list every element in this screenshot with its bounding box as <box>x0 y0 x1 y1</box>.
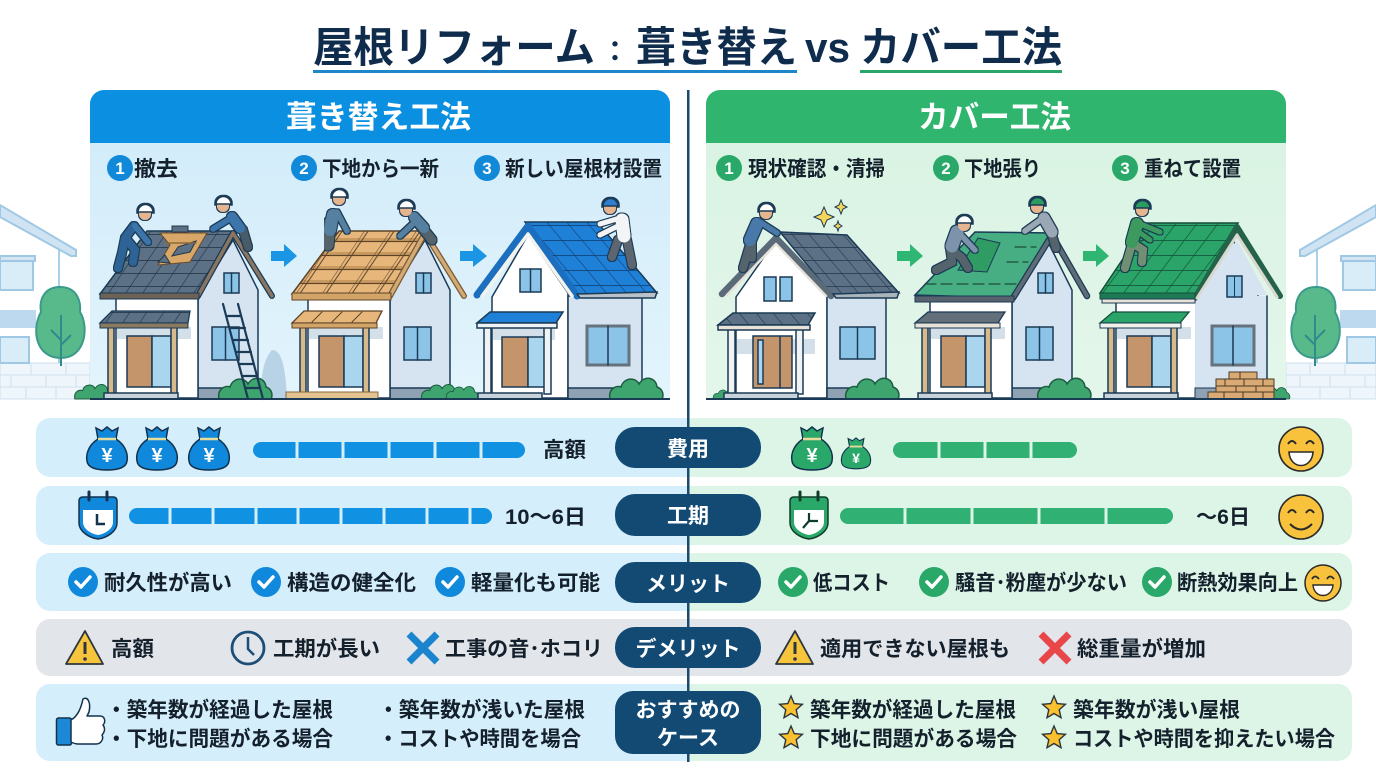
step 1 label <box>107 155 178 181</box>
worker: crouching on roof <box>118 205 153 268</box>
list: replacement cases column 1 <box>106 698 333 751</box>
value: 10 to 6 days: 10〜6日 <box>505 506 586 529</box>
icon: two money bags <box>792 427 871 470</box>
pill label: recommended cases <box>615 691 761 754</box>
list: cover cases column 1: 築年数が経過した屋根 <box>810 698 1016 722</box>
demerit: added weight: 総重量が増加 <box>1077 637 1206 661</box>
arrow 1 <box>271 244 297 267</box>
bar: short duration <box>840 508 1173 524</box>
list: replacement cases column 1: ・下地に問題がある場合 <box>106 727 333 751</box>
comparison row: cost <box>36 418 1352 477</box>
merit: less noise and dust <box>919 567 1127 597</box>
panel: cover method <box>706 90 1290 400</box>
list: cover cases column 2: コストや時間を抑えたい場合 <box>1073 728 1335 751</box>
step 2 label: 2 <box>941 159 951 178</box>
icon: two money bags: ¥ <box>852 450 860 466</box>
merit: durable: 耐久性が高い <box>104 571 232 595</box>
pill label: recommended cases: おすすめの <box>636 699 740 722</box>
demerit: expensive: 高額 <box>111 638 154 661</box>
panel: roof replacement <box>75 90 670 400</box>
title: 葺き替え <box>636 24 797 71</box>
value: up to 6 days: 〜6日 <box>1196 506 1250 529</box>
demerit: unsuitable roofs: 適用できない屋根も <box>820 638 1010 661</box>
icon: three money bags: ¥ <box>151 445 163 467</box>
worker: removing tiles <box>213 196 248 247</box>
comparison row: recommended cases <box>36 684 1352 761</box>
ground line right <box>706 398 1286 400</box>
icon: red cross <box>1041 634 1069 662</box>
list: cover cases column 2: 築年数が浅い屋根 <box>1073 698 1240 722</box>
merit: better insulation: 断熱効果向上 <box>1177 572 1298 595</box>
house: new blue roof <box>446 198 663 399</box>
step 1 label: 現状確認・清掃 <box>748 158 885 181</box>
step 3 label: 3 <box>1120 159 1130 178</box>
demerit: long duration: 工期が長い <box>273 637 380 661</box>
panel header: cover method <box>706 90 1286 143</box>
icon: three money bags: ¥ <box>203 445 215 467</box>
merit: low cost <box>778 567 890 597</box>
worker: on ridge <box>1025 198 1056 248</box>
list: replacement cases column 2: ・コストや時間を場合 <box>378 728 581 751</box>
pill label: cost: 費用 <box>667 438 709 461</box>
list: replacement cases column 2 <box>378 698 585 751</box>
worker: kneeling with sheet <box>936 216 975 270</box>
title: 屋根リフォーム <box>313 24 595 71</box>
step 3 label: 重ねて設置 <box>1144 158 1241 181</box>
step 2 label <box>291 155 439 181</box>
comparison row: merits <box>36 553 1352 611</box>
title: カバー工法 <box>860 24 1062 71</box>
merit: sound structure: 構造の健全化 <box>287 572 416 595</box>
worker: laying blue panels <box>600 198 632 265</box>
pill label: duration <box>615 494 761 536</box>
ground line left <box>90 398 670 400</box>
center divider <box>687 90 690 762</box>
step 2 label <box>933 155 1041 181</box>
arrow 2 <box>460 244 487 267</box>
worker: on gable <box>399 201 432 240</box>
pill label: merits <box>615 562 761 603</box>
step 1 label: 1 <box>115 159 125 178</box>
step 3 label: 新しい屋根材設置 <box>505 158 662 181</box>
panel header: roof replacement: 葺き替え工法 <box>286 100 471 135</box>
value: high cost: 高額 <box>543 439 586 462</box>
sparkles <box>814 200 847 231</box>
step 3 label: 3 <box>482 159 492 178</box>
bar: low cost <box>893 442 1077 458</box>
comparison row: duration <box>36 486 1352 545</box>
arrow 3 <box>897 244 923 267</box>
ladder <box>223 304 263 399</box>
step 2 label: 2 <box>299 159 309 178</box>
icon: blue calendar clock <box>79 492 117 539</box>
house: tearing off old roof <box>75 196 287 399</box>
icon: warning triangle <box>776 631 813 664</box>
step 1 label: 撤去 <box>134 158 178 181</box>
background houses left and right <box>0 205 1376 399</box>
pill label: cost <box>615 427 761 468</box>
title: ： <box>601 36 629 67</box>
title <box>313 24 1062 73</box>
icon: green calendar clock <box>790 492 828 539</box>
merit: less noise and dust: 騒音･粉塵が少ない <box>955 571 1127 595</box>
bar: high cost <box>253 442 525 458</box>
title: vs <box>805 24 850 71</box>
icon: grinning face <box>1279 427 1323 471</box>
icon: thumbs up <box>56 698 105 745</box>
merit: lighter weight: 軽量化も可能 <box>471 572 600 595</box>
merit: better insulation <box>1142 567 1298 597</box>
comparison row: demerits <box>36 619 1352 676</box>
list: cover cases column 2 <box>1043 696 1335 751</box>
stacked bricks <box>1208 372 1274 399</box>
worker: at roof top <box>328 190 347 245</box>
icon: three money bags <box>87 427 229 470</box>
step 2 label: 下地張り <box>964 158 1041 181</box>
bar: long duration <box>129 508 492 524</box>
icon: warning triangle <box>66 631 103 664</box>
house: new green roof <box>1100 201 1290 399</box>
icon: two money bags: ¥ <box>806 445 818 467</box>
arrow 4 <box>1083 244 1109 267</box>
panel header: cover method: カバー工法 <box>918 100 1071 135</box>
pill label: merits: メリット <box>646 573 730 596</box>
merit: lighter weight <box>435 567 600 597</box>
pill label: demerits <box>615 627 761 668</box>
house: new underlayment <box>286 190 464 399</box>
icon: small grinning face <box>1305 565 1341 601</box>
worker: laying green panels <box>1125 201 1160 268</box>
icon: three money bags: ¥ <box>101 445 113 467</box>
step 1 label: 1 <box>724 159 734 178</box>
merit: durable <box>68 567 232 597</box>
house: inspection of old roof <box>713 200 899 399</box>
pill label: demerits: デメリット <box>636 637 740 661</box>
merit: low cost: 低コスト <box>813 572 890 595</box>
icon: smiling face <box>1279 495 1323 539</box>
list: cover cases column 1: 下地に問題がある場合 <box>810 727 1017 751</box>
list: replacement cases column 1: ・築年数が経過した屋根 <box>106 698 333 722</box>
list: cover cases column 1 <box>780 696 1017 751</box>
demerit: noise and dust: 工事の音･ホコリ <box>445 637 603 661</box>
step 1 label <box>716 155 885 181</box>
step 3 label <box>1112 155 1241 181</box>
pill label: recommended cases: ケース <box>657 727 719 750</box>
pill label: duration: 工期 <box>667 505 709 528</box>
step 2 label: 下地から一新 <box>322 158 439 181</box>
list: replacement cases column 2: ・築年数が浅いた屋根 <box>378 698 585 722</box>
merit: sound structure <box>251 567 416 597</box>
house: underlayment sheet <box>915 198 1091 399</box>
icon: blue cross <box>409 634 437 662</box>
worker: inspecting <box>743 204 777 268</box>
panel header: roof replacement <box>90 90 670 143</box>
icon: clock <box>232 632 264 664</box>
